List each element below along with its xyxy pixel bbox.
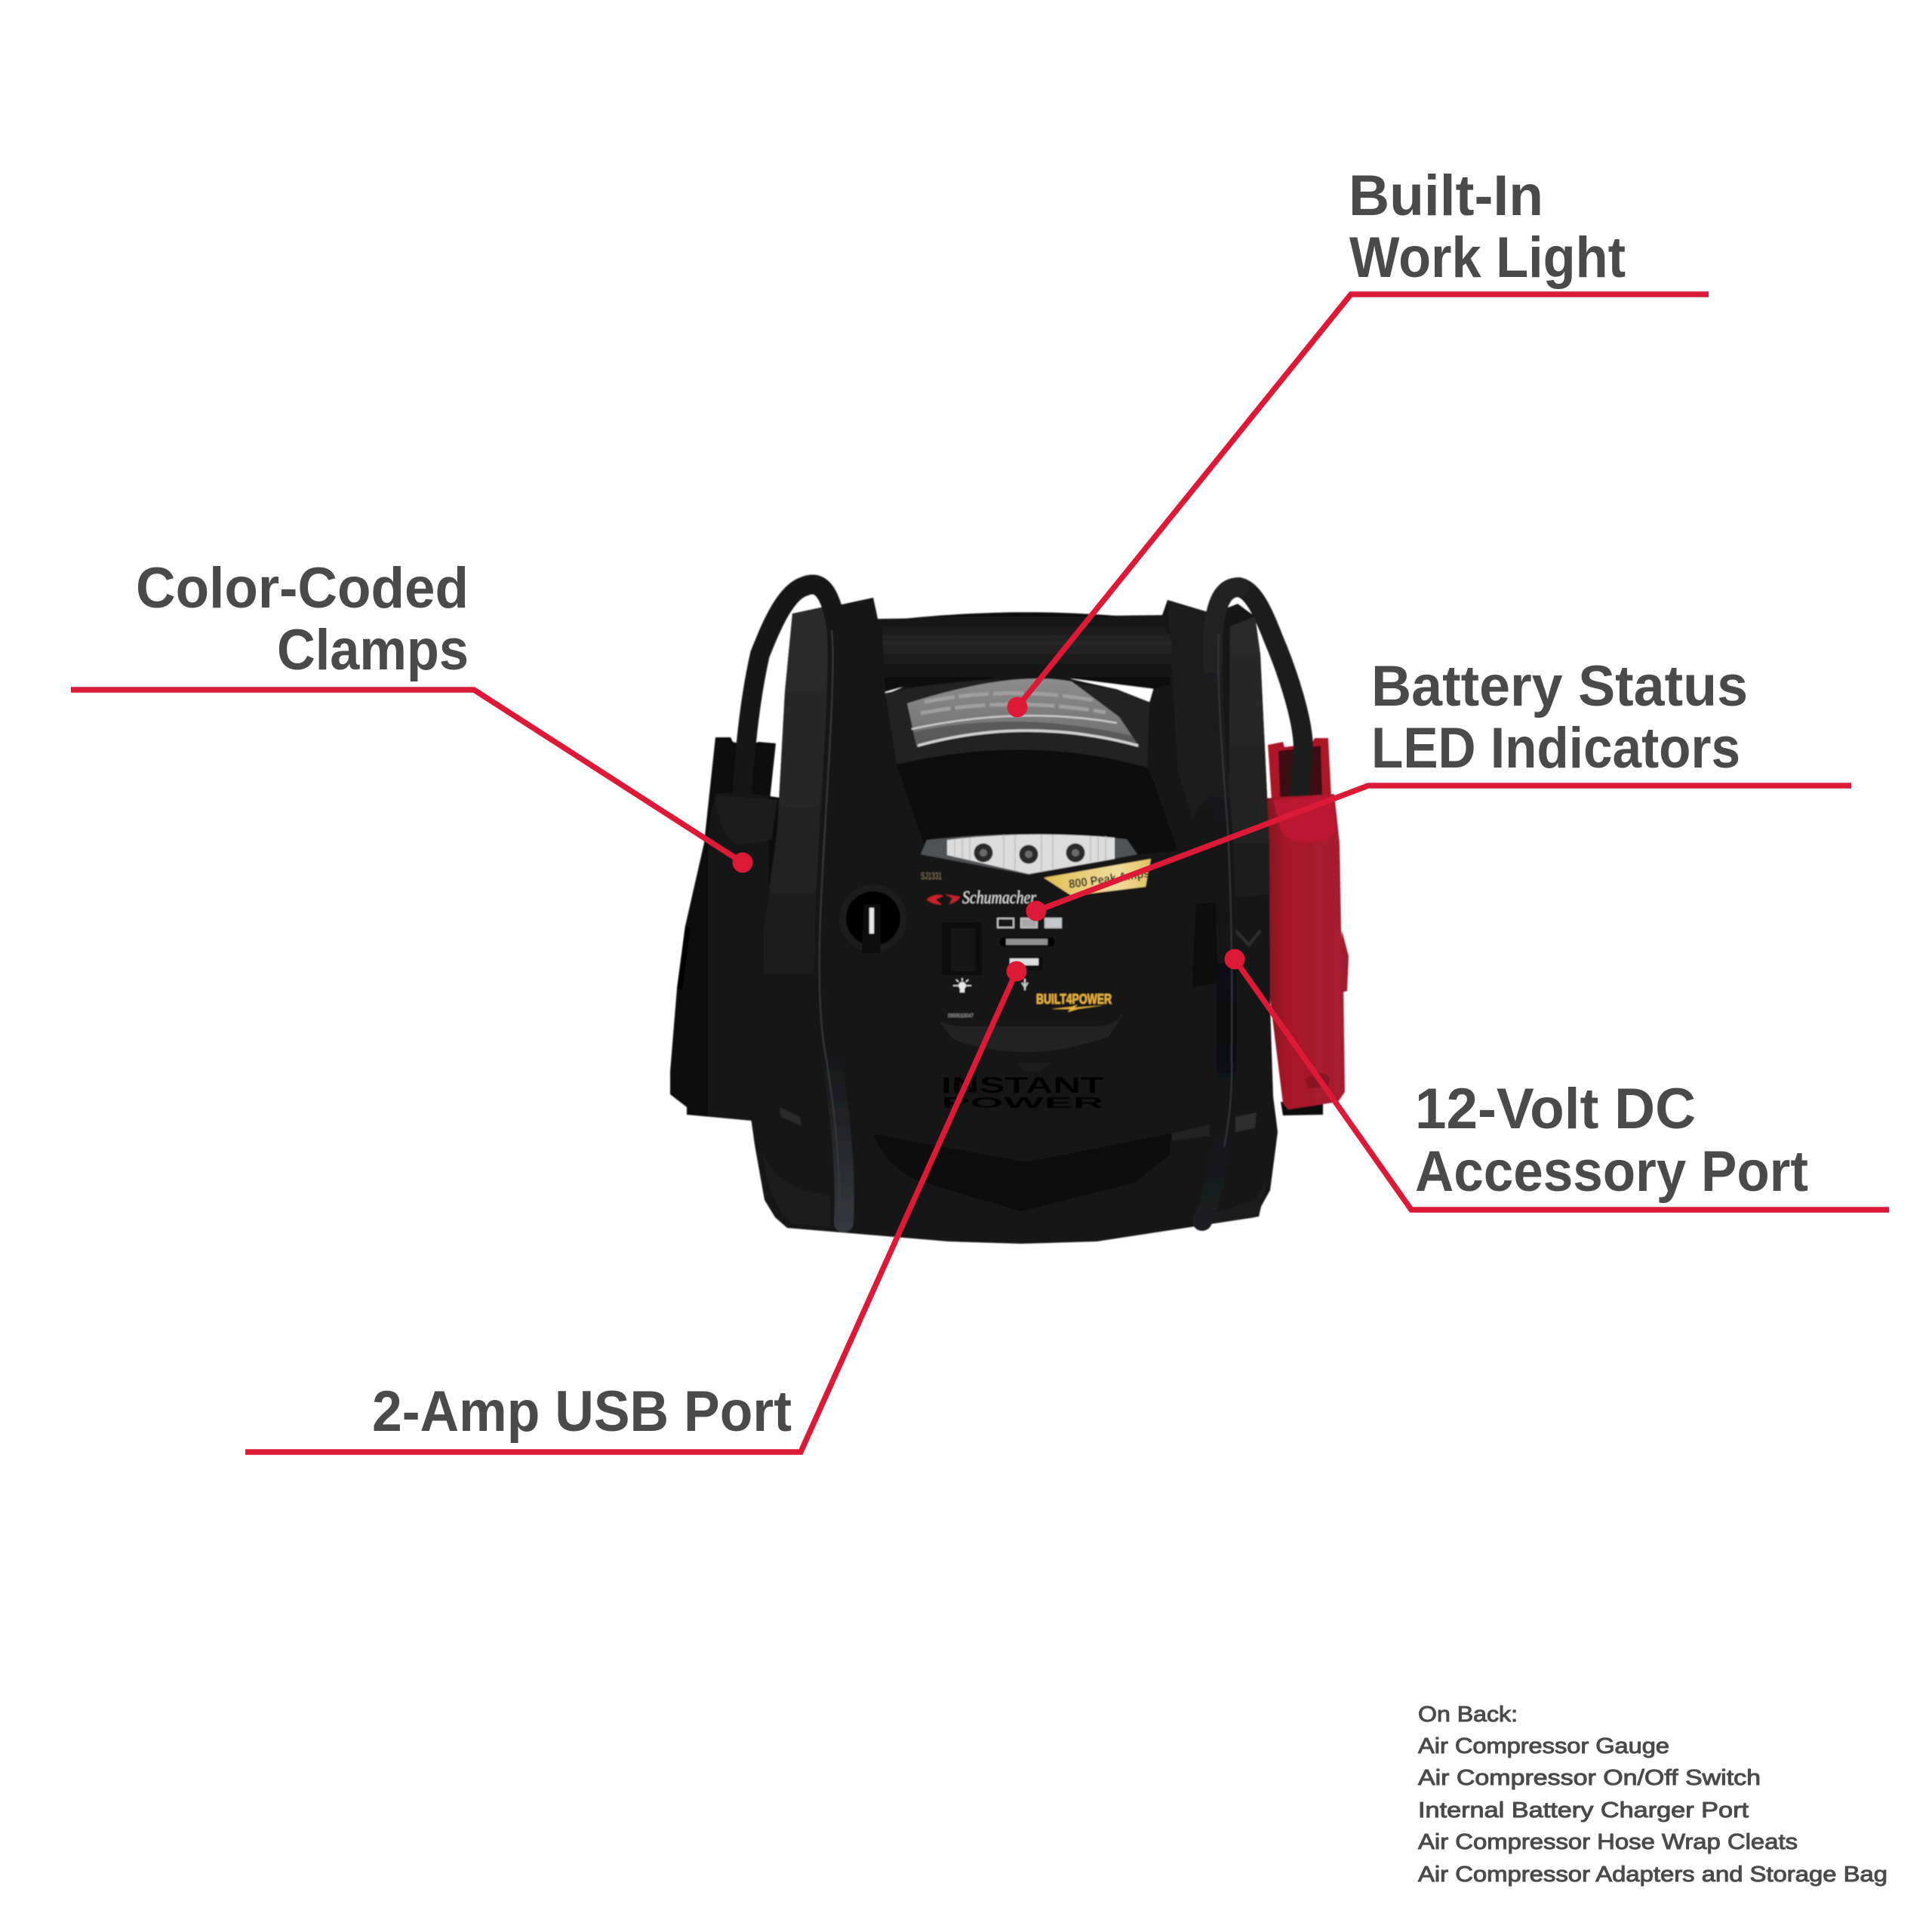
warning label [885,678,1149,768]
callout: battery status LED indicators: Battery Status [1371,654,1748,718]
text block: on back features: Air Compressor Adapters and Storage Bag [1418,1863,1887,1887]
peak amps badge: 800 Peak Amps [1068,867,1151,891]
built 4 power logo [1036,992,1112,1012]
callout: battery status LED indicators: LED Indicators [1371,716,1740,780]
built 4 power logo: BUILT4POWER [1036,992,1112,1007]
rear cable strand: right [1238,587,1303,797]
right side shell highlight [1229,617,1270,981]
text block: on back features: Internal Battery Charger Port [1418,1798,1749,1823]
callout: color-coded clamps [71,556,753,872]
product photo: portable jump starter [670,584,1349,1244]
text block: on back features: On Back: [1418,1703,1518,1727]
callout: 2-amp USB port [245,961,1026,1452]
control panel [907,834,1151,1072]
brand logo: Schumacher [962,888,1037,908]
icon: light bulb [953,978,971,992]
embossed brand [941,1073,1106,1112]
callout: built-in work light [1007,164,1709,717]
callout: battery status LED indicators [1026,654,1851,921]
black clamp jaw [704,737,776,843]
callout: built-in work light: Work Light [1349,226,1626,290]
main body shell [749,598,1278,1244]
callout: 12-volt DC accessory port [1224,949,1889,1210]
red clamp body [1264,794,1349,1115]
right top cap [1168,600,1213,819]
part number: 0899010047 [948,1014,974,1019]
rear cable strand: left [742,586,808,797]
callout: color-coded clamps: Color-Coded [136,556,469,620]
accessory port [1192,894,1269,987]
text block: on back features: Air Compressor Gauge [1418,1734,1669,1758]
left top cap [836,598,881,860]
base chevron moulding [761,1107,1268,1241]
callout: 12-volt DC accessory port: Accessory Port [1415,1140,1808,1204]
usb port [1009,957,1043,971]
left cable [806,584,844,1223]
left side shell highlight [762,604,838,1072]
indicator slot [1000,937,1054,946]
text block: on back features [1418,1703,1887,1887]
black clamp body [670,792,785,1121]
carry handle [881,612,1172,702]
text block: on back features: Air Compressor Hose Wrap Cleats [1418,1830,1798,1854]
callout: 12-volt DC accessory port: 12-Volt DC [1415,1077,1696,1141]
red clamp jaw [1268,738,1331,800]
peak amps badge [1044,859,1151,896]
knob [839,884,907,953]
rocker switch [942,922,982,975]
work light [921,834,1137,875]
upper front housing [897,749,1177,854]
icon: usb [1022,979,1028,990]
brand logo [927,888,1037,908]
callout: color-coded clamps: Clamps [277,618,469,682]
embossed brand: POWER [941,1095,1106,1112]
callout: 2-amp USB port: 2-Amp USB Port [372,1380,792,1444]
text block: on back features: Air Compressor On/Off Switch [1418,1766,1761,1790]
embossed brand: INSTANT [941,1073,1104,1098]
callout: built-in work light: Built-In [1349,164,1543,228]
battery status LEDs [998,918,1061,928]
model number: SJ1331 [921,870,942,881]
right cable [1202,587,1239,1221]
